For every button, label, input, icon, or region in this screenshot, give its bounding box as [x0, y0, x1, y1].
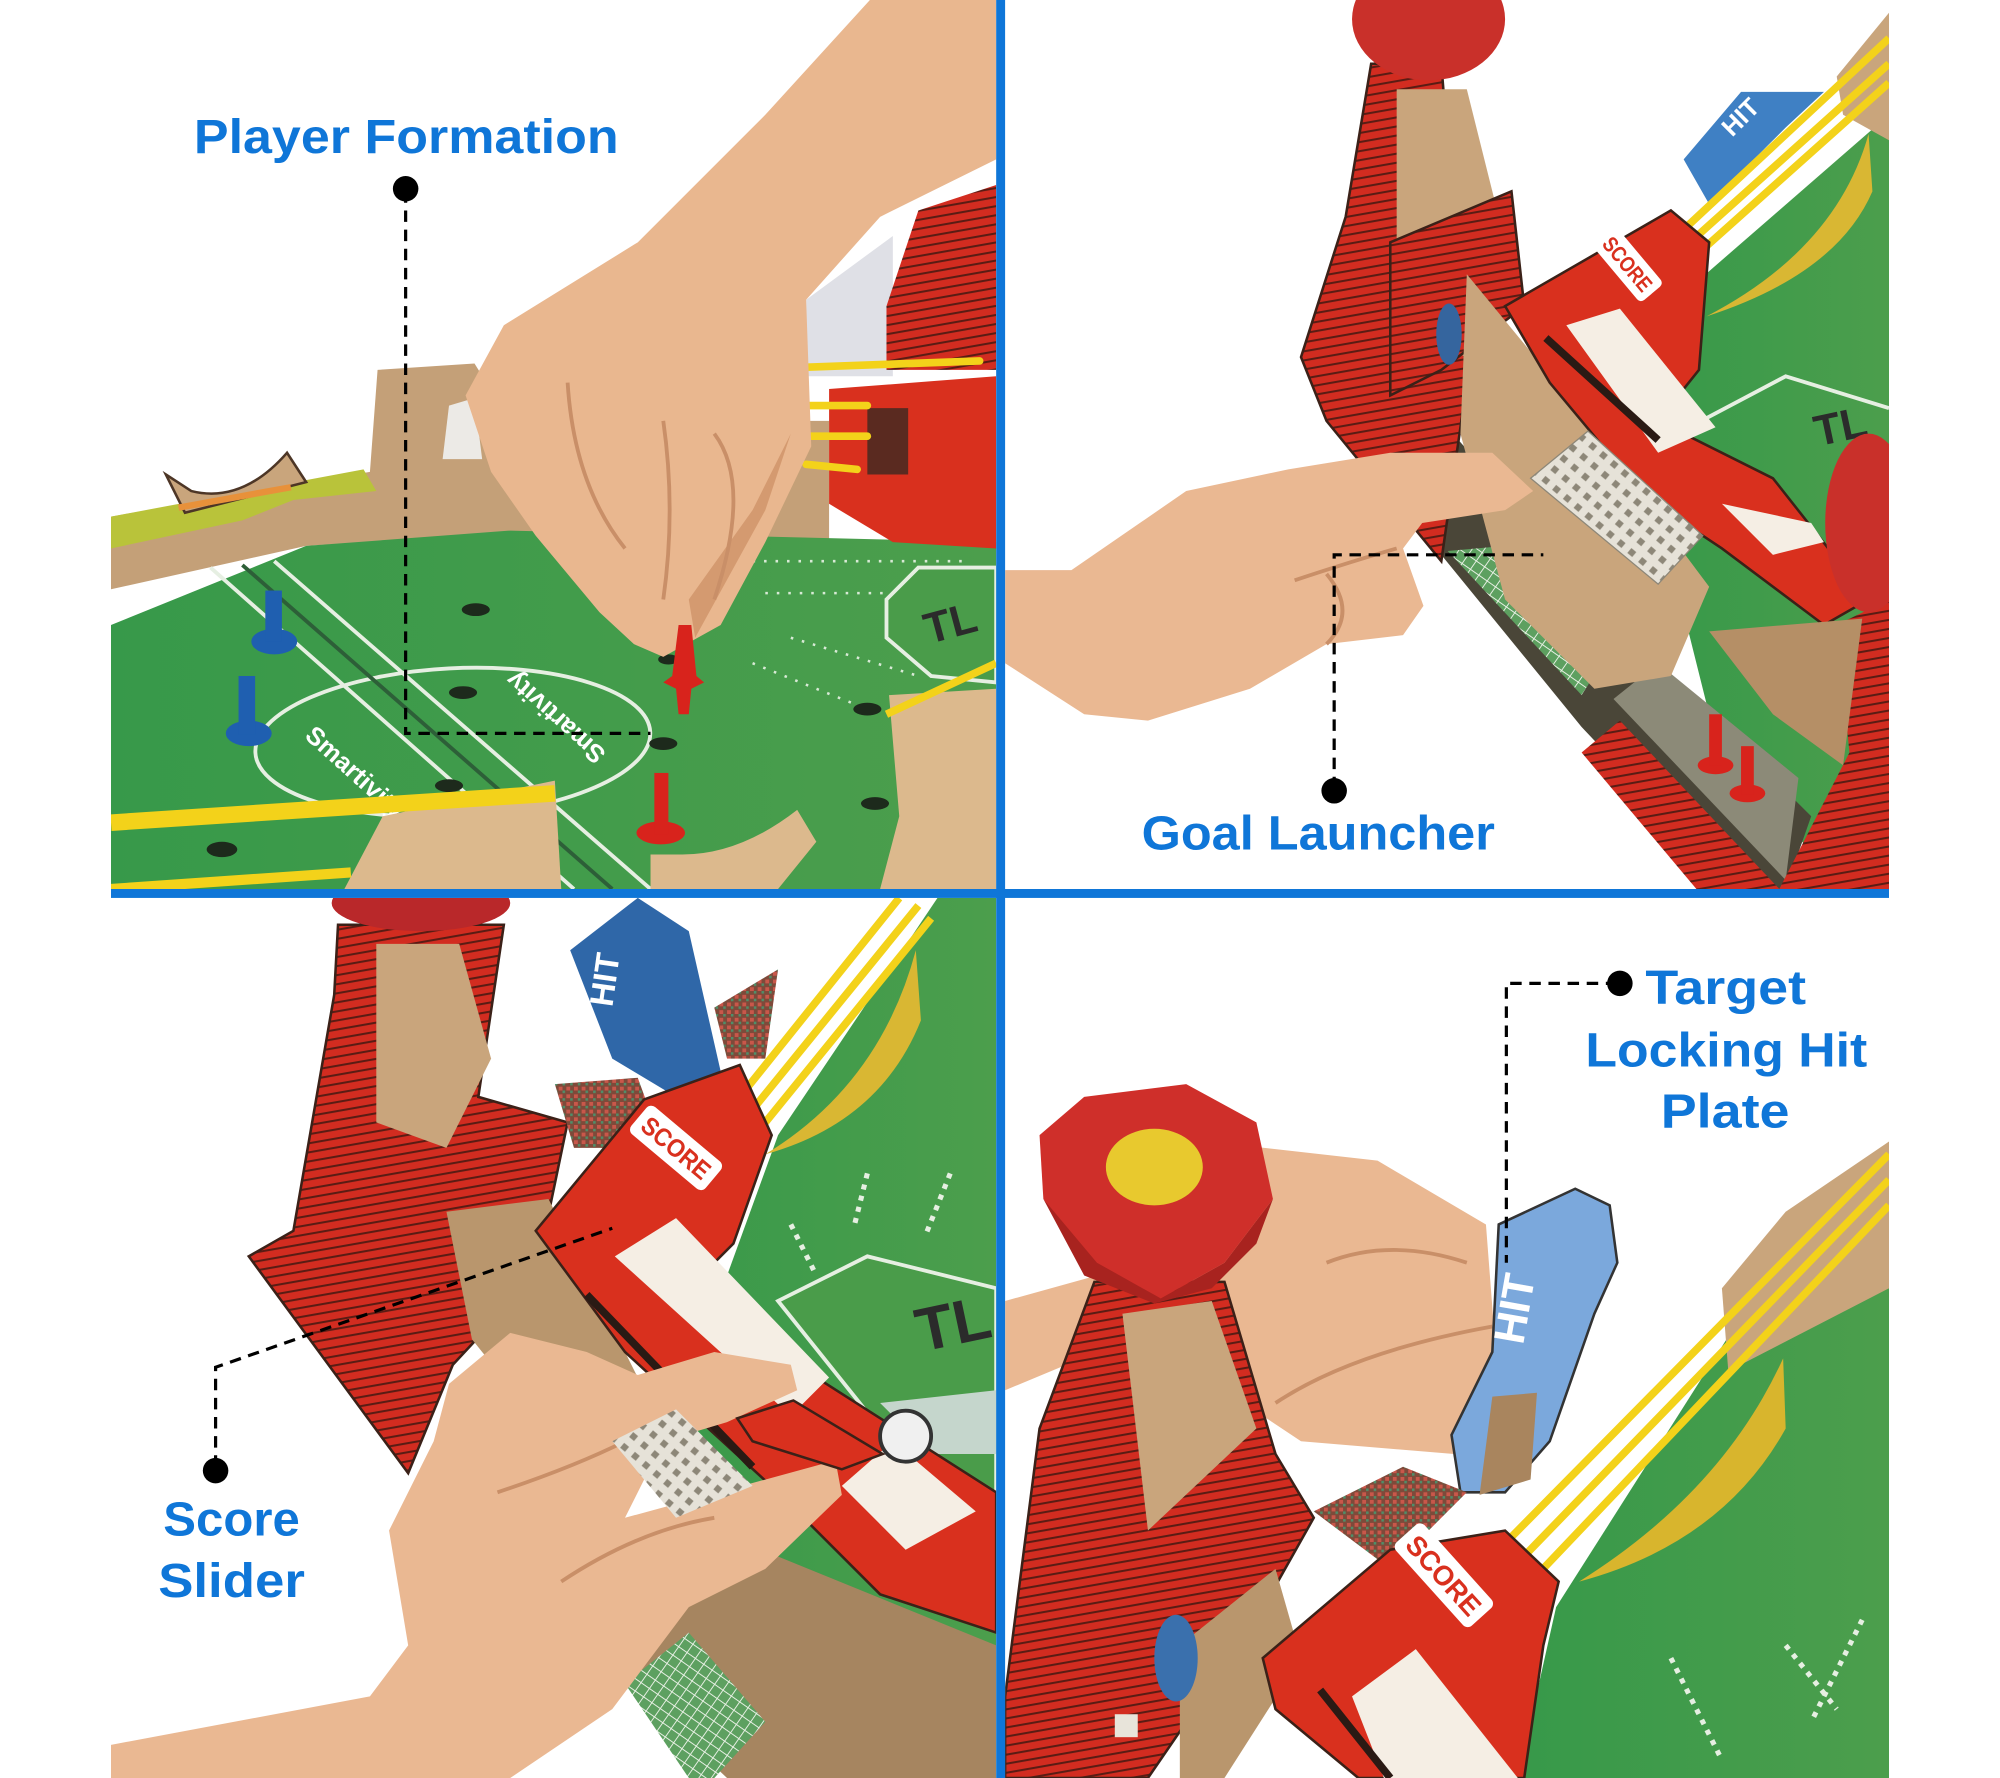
- pitch lines: [210, 561, 654, 889]
- heading: score slider: [158, 1493, 305, 1608]
- right tower: [1779, 599, 1889, 889]
- slider slit: [1546, 338, 1658, 440]
- heading: target locking hit plate: Target: [1645, 961, 1806, 1015]
- slider slit: [1320, 1690, 1390, 1778]
- red score arm: [1263, 1531, 1559, 1778]
- yellow strip: [111, 469, 376, 548]
- orange band on holder: [179, 487, 291, 508]
- wooden wall: [111, 364, 829, 589]
- wooden wall: [1722, 1142, 1889, 1371]
- crowd panels: [555, 1078, 663, 1148]
- orange fan on pitch: [765, 950, 921, 1154]
- red score arm: [1505, 210, 1869, 625]
- score scale: [1352, 1649, 1518, 1778]
- heading: target locking hit plate: Plate: [1661, 1085, 1790, 1139]
- orange fan: [1579, 1358, 1786, 1582]
- heading: target locking hit plate: Locking Hit: [1585, 1023, 1867, 1077]
- pitch dashes: [791, 1173, 950, 1275]
- score scale: [615, 1218, 829, 1416]
- pitch logo: [778, 1256, 996, 1505]
- field holes: [207, 603, 889, 857]
- hand: [111, 1333, 842, 1778]
- score badge: SCORE: [635, 1112, 716, 1186]
- heading: target locking hit plate: [1585, 961, 1867, 1139]
- hand finger creases: [568, 383, 733, 599]
- hit label: HIT: [1717, 93, 1766, 142]
- grey mesh goal: [1531, 431, 1703, 584]
- blue hit plate: [1452, 1189, 1617, 1492]
- hand shadow: [689, 434, 791, 638]
- logo letters: TL: [919, 594, 982, 654]
- grey mesh: [612, 1409, 753, 1518]
- wooden bottom pieces: [344, 781, 561, 889]
- goal net floor: [1448, 546, 1610, 695]
- hit label: HIT: [584, 951, 628, 1009]
- red striped panel: [1390, 191, 1524, 395]
- pitch dashes: [1671, 1620, 1862, 1760]
- wooden launcher: [1460, 274, 1709, 689]
- heading: score slider: Slider: [158, 1554, 305, 1608]
- blue vertical divider: [996, 0, 1005, 1778]
- tower wood centre: [376, 944, 491, 1148]
- logo letters: TL: [909, 1283, 997, 1365]
- white wall icon: [443, 398, 482, 459]
- tower stripes: [249, 925, 568, 1473]
- L tag: [1115, 1714, 1138, 1737]
- pitch dashes: [753, 561, 969, 714]
- green pitch: [1685, 130, 1889, 843]
- lower wood and net: [600, 1531, 996, 1778]
- heading: player formation: Player Formation: [194, 110, 619, 164]
- slider slit: [587, 1295, 753, 1467]
- stand base: [1327, 421, 1811, 889]
- red striped base: [1005, 1282, 1314, 1778]
- hand crease: [1295, 548, 1397, 644]
- green pitch: [638, 898, 996, 1778]
- yellow rubber bands: [1684, 38, 1889, 255]
- wood tower: [1122, 1301, 1256, 1531]
- panel: player formation: [111, 0, 996, 889]
- red score arm: [536, 1065, 996, 1633]
- wooden inner: [1180, 1569, 1301, 1778]
- blue hit plate: [1684, 92, 1824, 204]
- heading: goal launcher: Goal Launcher: [1142, 806, 1495, 860]
- finger crease: [497, 1441, 714, 1582]
- heading: score slider: Score: [163, 1493, 300, 1547]
- grey strip behind ball: [880, 1390, 996, 1454]
- foam top: [1040, 1084, 1273, 1298]
- panel: target locking hit plate: [1005, 1084, 1889, 1778]
- wall backdrop: [806, 236, 893, 376]
- blue horizontal divider: [111, 889, 1889, 898]
- wooden arc holder: [166, 453, 306, 513]
- lower red pins: [1698, 714, 1765, 802]
- pitch hexagon: [1696, 376, 1889, 423]
- panel: goal launcher: [1005, 0, 1912, 889]
- wood inside: [446, 1199, 663, 1467]
- lower wood parts: [1709, 619, 1862, 765]
- slider tab: [737, 1400, 883, 1469]
- tower wood: [1397, 89, 1499, 357]
- hand: [466, 0, 996, 657]
- red foam top: [332, 875, 510, 931]
- red tower: [886, 185, 996, 370]
- score badge: SCORE: [1597, 232, 1657, 297]
- hand behind plate: [1005, 1144, 1499, 1454]
- score scale: [1566, 309, 1716, 453]
- lower red stripes: [1582, 721, 1779, 889]
- blue wheel: [1154, 1615, 1198, 1701]
- smartivity left: Smartivity: [300, 721, 411, 825]
- right foam: [1825, 434, 1912, 612]
- blue wheel: [1436, 304, 1462, 365]
- tower red stripes: [1301, 64, 1467, 561]
- yellow ball: [1106, 1129, 1203, 1205]
- red launcher block: [829, 376, 996, 548]
- green pitch: [1518, 1288, 1889, 1778]
- grey floor strip: [1613, 663, 1798, 880]
- logo mark: TL: [1810, 398, 1871, 456]
- field logo: [886, 568, 996, 682]
- blue hit plate: [570, 898, 721, 1097]
- crowd panel: [1314, 1467, 1467, 1569]
- blue player pins: [226, 591, 297, 746]
- lower red pin: [636, 773, 685, 844]
- foam base layer: [1043, 1199, 1273, 1304]
- pitch dark stripe: [242, 565, 612, 889]
- orange fan on pitch: [1707, 134, 1872, 316]
- soccer ball: [880, 1411, 931, 1462]
- hand: [1005, 453, 1533, 721]
- green field: [111, 531, 996, 889]
- callout: target locking hit plate: [1506, 971, 1633, 1263]
- wooden clip: [1480, 1393, 1537, 1495]
- score badge: SCORE: [1399, 1529, 1487, 1622]
- callout: goal launcher: [1321, 555, 1543, 804]
- hit label: HIT: [1486, 1270, 1545, 1347]
- yellow rubber bands: [804, 361, 980, 469]
- callout: score slider: [203, 1228, 612, 1483]
- panel: score slider: [111, 875, 997, 1778]
- bottom yellow bands: [111, 663, 996, 889]
- wooden corner: [1837, 13, 1889, 140]
- hand crease: [1276, 1250, 1492, 1403]
- callout: player formation: [393, 176, 651, 733]
- held red pin: [663, 625, 704, 714]
- yellow rubber bands: [740, 898, 931, 1122]
- red foam top: [1352, 0, 1505, 80]
- smartivity right: Smartivity: [500, 665, 611, 769]
- yellow bands: [1511, 1154, 1889, 1575]
